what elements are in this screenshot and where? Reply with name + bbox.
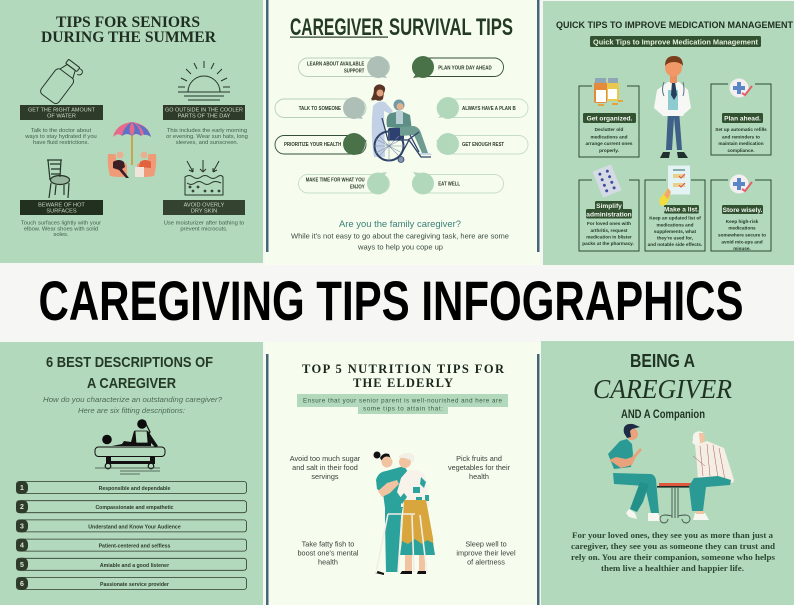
heading: medication management: QUICK TIPS TO IMPROVE MEDICATION MANAGEMENT xyxy=(556,20,793,30)
heading: caregiver script: CAREGIVER xyxy=(593,374,732,404)
card: simplify administration: packs at the pharmacy. xyxy=(582,241,634,246)
text: avoid sugar and salt xyxy=(290,454,361,481)
text: sleep well: improve their level xyxy=(456,548,516,558)
panel: tips for seniors during the summer xyxy=(0,0,263,263)
tip: plan your day ahead xyxy=(412,56,504,78)
text: caregiver companion paragraph xyxy=(571,531,776,573)
icon: medical plus with check xyxy=(730,174,752,194)
card: get organized: medications and xyxy=(590,134,628,140)
banner: beware of hot surfaces xyxy=(20,200,103,215)
heading: 6 best descriptions xyxy=(46,354,213,392)
tip: make time for what you enjoy xyxy=(298,172,390,194)
list: description 3: Understand and Know Your Audience xyxy=(88,524,181,530)
panel: caregiver survival tips xyxy=(265,0,540,265)
card: plan ahead: compliance. xyxy=(727,148,755,153)
card: get organized xyxy=(579,78,639,157)
list: description 5 xyxy=(16,558,246,571)
heading: tips for seniors: TIPS FOR SENIORS xyxy=(56,14,200,31)
heading: tips for seniors: DURING THE SUMMER xyxy=(41,29,217,46)
list: description 2: Compassionate and empathetic xyxy=(95,505,174,511)
list: description 3 xyxy=(16,519,246,532)
text: avoid sugar and salt: and salt in their food xyxy=(292,463,358,472)
list: description 1 xyxy=(16,481,246,494)
card: make a list: Make a list. xyxy=(664,206,699,214)
text: fatty fish xyxy=(297,540,359,566)
text: water tip: Talk to the doctor about xyxy=(31,128,92,134)
card: simplify administration xyxy=(579,164,639,251)
text: caregiver question: Here are six fitting descriptions: xyxy=(78,406,185,415)
heading: caregiver survival tips: SURVIVAL TIPS xyxy=(389,14,513,41)
text: fruits and vegetables: vegetables for their xyxy=(448,463,511,472)
text: caregiver companion paragraph: For your loved ones, they see you as more than just a xyxy=(572,531,773,540)
text: caregiving intro xyxy=(291,232,509,252)
card: make a list: supplements, what xyxy=(654,229,697,234)
tip: make time for what you enjoy: ENJOY xyxy=(350,184,365,190)
banner: get the right amount of water xyxy=(20,105,103,120)
text: caregiving intro: While it's not easy to go about the caregiving task, here are some xyxy=(291,232,509,240)
list: description 6 xyxy=(16,577,246,590)
tip: plan your day ahead: PLAN YOUR DAY AHEAD xyxy=(438,66,492,72)
heading: tips for seniors xyxy=(41,14,217,46)
panel: being a caregiver and a companion xyxy=(541,341,794,605)
list: description 2: 2 xyxy=(20,504,24,511)
text: are you the family caregiver: Are you the family caregiver? xyxy=(339,219,461,229)
list: description 4 xyxy=(16,539,246,552)
text: dry skin tip: Use moisturizer after bathing to xyxy=(164,220,244,226)
list: description 4: Patient-centered and selfless xyxy=(99,544,171,550)
card: simplify administration: For loved ones with xyxy=(587,221,631,226)
tip: eat well: EAT WELL xyxy=(438,182,461,188)
panel: 6 best descriptions of a caregiver xyxy=(0,342,263,605)
card: store wisely: somewhere secure to xyxy=(718,232,766,238)
card: store wisely: medications xyxy=(728,226,756,230)
panel: quick tips to improve medication management xyxy=(543,1,794,265)
text: caregiver companion paragraph: rely on. You are their companion, someone who helps xyxy=(571,553,775,562)
banner: go outside in the cooler parts of the day xyxy=(163,105,245,120)
text: outdoors tip xyxy=(166,128,248,146)
list: description 6: 6 xyxy=(20,581,24,588)
card: make a list: medications and xyxy=(656,222,694,228)
list: description 5: Amiable and a good listener xyxy=(100,563,169,569)
tip: prioritize your health xyxy=(275,133,367,155)
text: sleep well: of alertness xyxy=(467,558,505,566)
banner: beware of hot surfaces: SURFACES xyxy=(46,208,77,214)
small table with board xyxy=(657,483,692,523)
callout: nutrition intro: some tips to attain that: xyxy=(363,406,443,412)
heading: caregiver survival tips xyxy=(290,14,513,41)
icon: dry skin with arrows xyxy=(185,160,223,195)
card: plan ahead: and reminders to xyxy=(722,134,760,140)
card: get organized: properly. xyxy=(599,148,619,153)
callout: nutrition intro: Ensure that your senior parent is well-nourished and here are xyxy=(303,398,503,404)
text: fruits and vegetables: Pick fruits and xyxy=(456,454,502,463)
text: fatty fish: boost one's mental xyxy=(297,548,359,558)
card: simplify administration: medication in blister xyxy=(586,234,632,240)
text: outdoors tip: This includes the early morning xyxy=(167,128,247,134)
card: get organized: Get organized. xyxy=(587,116,633,122)
text: caregiver companion paragraph: caregiver, they see you as someone they can trust and xyxy=(571,542,776,551)
icon: sun on horizon xyxy=(178,61,230,100)
card: simplify administration: Simplify xyxy=(596,203,622,210)
tip: learn about available support: LEARN ABOUT AVAILABLE xyxy=(307,62,365,68)
icon: pill bottles xyxy=(594,78,623,105)
tip: talk to someone xyxy=(275,97,366,119)
text: hot surfaces tip: soles. xyxy=(53,232,69,238)
text: fruits and vegetables xyxy=(448,454,511,481)
heading: and a companion: AND A Companion xyxy=(621,409,705,421)
card: plan ahead xyxy=(711,78,771,155)
card: store wisely xyxy=(711,174,771,251)
card: store wisely: Store wisely. xyxy=(723,207,763,214)
illustration: doctor xyxy=(654,56,691,158)
icon: checklist in hand xyxy=(659,166,690,206)
card: plan ahead: maintain medication xyxy=(718,141,764,146)
banner: avoid overly dry skin: AVOID OVERLY xyxy=(184,202,225,208)
list: description 4: 4 xyxy=(20,543,24,550)
list: description 5: 5 xyxy=(20,562,24,569)
text: water tip: ways to stay hydrated if you xyxy=(24,134,97,140)
illustration: nurse and elderly woman xyxy=(374,452,435,575)
text: outdoors tip: or evening. Wear sun hats, long xyxy=(166,134,248,140)
card: store wisely: Keep high-risk xyxy=(726,219,759,224)
illustration: caregiver and elderly man at table xyxy=(608,424,734,523)
heading: nutrition tips: THE ELDERLY xyxy=(353,376,453,390)
tip: get enough rest: GET ENOUGH REST xyxy=(462,142,505,148)
heading: 6 best descriptions: A CAREGIVER xyxy=(87,375,176,392)
card: simplify administration: arthritis, request xyxy=(590,228,628,233)
text: fatty fish: health xyxy=(318,558,338,566)
text: caregiver question xyxy=(43,395,223,415)
text: sleep well: Sleep well to xyxy=(465,540,507,548)
text: dry skin tip: prevent microcuts. xyxy=(180,226,228,232)
text: outdoors tip: sleeves, and sunscreen. xyxy=(176,140,239,146)
text: water tip xyxy=(24,128,97,146)
subheading badge: Quick Tips to Improve Medication Management xyxy=(593,38,758,46)
banner: get the right amount of water: GET THE RIGHT AMOUNT xyxy=(28,108,96,114)
tip: always have a plan b: ALWAYS HAVE A PLAN B xyxy=(462,106,516,112)
text: fruits and vegetables: health xyxy=(469,472,489,481)
card: make a list: Keep an updated list of xyxy=(649,216,701,220)
tip: learn about available support xyxy=(298,56,390,78)
tip: talk to someone: TALK TO SOMEONE xyxy=(299,106,341,112)
card: store wisely: misuse. xyxy=(733,246,751,251)
banner: avoid overly dry skin: DRY SKIN xyxy=(191,208,217,214)
panel: top 5 nutrition tips for the elderly xyxy=(265,342,540,605)
card: store wisely: avoid mix-ups and xyxy=(721,240,763,244)
list: description 2 xyxy=(16,500,246,513)
icon: water bottle xyxy=(39,57,84,106)
heading: caregiver survival tips: CAREGIVER xyxy=(290,14,383,41)
illustration: seniors under umbrella xyxy=(108,122,156,178)
banner: go outside in the cooler parts of the day: PARTS OF THE DAY xyxy=(178,114,231,120)
illustration: nurse with wheelchair patient xyxy=(369,84,432,162)
list: description 1: 1 xyxy=(20,485,24,492)
heading: nutrition tips: TOP 5 NUTRITION TIPS FOR xyxy=(302,362,505,376)
tip: prioritize your health: PRIORITIZE YOUR HEALTH xyxy=(284,142,342,148)
text: avoid sugar and salt: Avoid too much sugar xyxy=(290,454,361,463)
caregiver seated xyxy=(608,424,661,521)
heading: nutrition tips xyxy=(302,362,505,390)
callout: nutrition intro xyxy=(297,394,508,414)
card: plan ahead: Plan ahead. xyxy=(724,116,761,122)
tip: always have a plan b xyxy=(437,97,528,119)
list: description 6: Passionate service provider xyxy=(100,582,169,588)
banner: go outside in the cooler parts of the day: GO OUTSIDE IN THE COOLER xyxy=(165,108,243,114)
banner: avoid overly dry skin xyxy=(163,200,245,215)
text: caregiver question: How do you characterize an outstanding caregiver? xyxy=(43,395,223,404)
icon: caregiver with patient on bed xyxy=(95,419,165,474)
list: description 3: 3 xyxy=(20,523,24,530)
elderly man seated xyxy=(689,431,734,520)
tip: learn about available support: SUPPORT xyxy=(344,68,365,74)
text: caregiving intro: ways to help you cope up xyxy=(357,242,443,252)
card: simplify administration: administration xyxy=(586,212,632,218)
text: hot surfaces tip: elbow. Wear shoes with solid xyxy=(24,226,98,232)
card: plan ahead: Set up automatic refills xyxy=(715,127,767,132)
text: avoid sugar and salt: servings xyxy=(311,472,339,481)
heading: being a: BEING A xyxy=(630,351,695,371)
text: fatty fish: Take fatty fish to xyxy=(302,540,354,548)
tip: make time for what you enjoy: MAKE TIME FOR WHAT YOU xyxy=(306,178,365,184)
text: hot surfaces tip xyxy=(21,220,101,238)
banner: get the right amount of water: OF WATER xyxy=(47,114,76,120)
banner: beware of hot surfaces: BEWARE OF HOT xyxy=(38,202,85,208)
text: sleep well xyxy=(456,540,516,566)
icon: blister pack xyxy=(592,164,622,198)
text: water tip: have fluid restrictions. xyxy=(33,140,89,146)
tip: get enough rest xyxy=(436,133,528,155)
list: description 1: Responsible and dependable xyxy=(99,486,170,492)
icon: wooden chair xyxy=(47,160,70,198)
text: caregiver companion paragraph: them live a healthier and happier life. xyxy=(601,564,744,573)
tip: eat well xyxy=(412,172,504,194)
card: make a list: they're used for, xyxy=(657,236,693,240)
card: make a list: and notable side effects. xyxy=(648,242,702,247)
card: make a list xyxy=(645,166,705,251)
heading: 6 best descriptions: 6 BEST DESCRIPTIONS OF xyxy=(46,354,213,371)
card: get organized: arrange current ones xyxy=(586,141,633,146)
card: get organized: Declutter old xyxy=(595,127,623,132)
text: hot surfaces tip: Touch surfaces lightly with your xyxy=(21,220,101,226)
text: dry skin tip xyxy=(164,220,244,232)
icon: medical plus with check xyxy=(730,78,752,98)
